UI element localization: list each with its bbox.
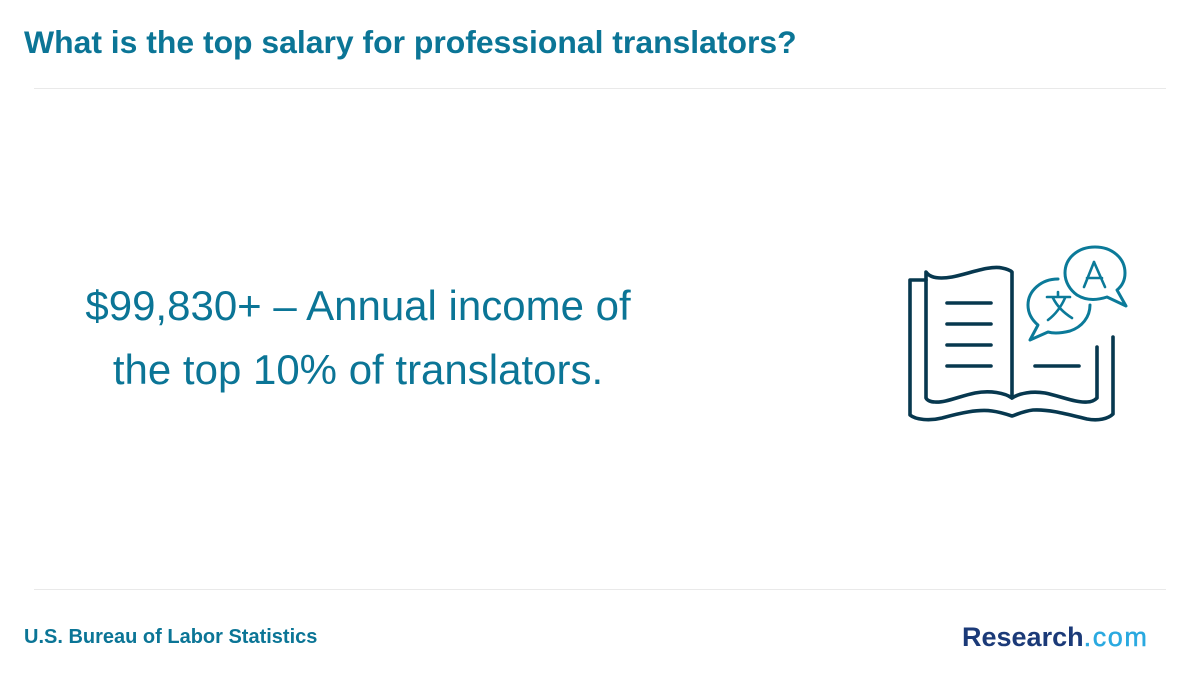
logo: Research.com: Research.com — [962, 622, 1149, 652]
source: U.S. Bureau of Labor Statistics — [24, 626, 317, 648]
main statistic text: the top 10% of translators. — [113, 346, 603, 392]
icon: open book with translation speech bubbles — [908, 246, 1128, 422]
title: What is the top salary for professional translators? — [24, 24, 797, 60]
main statistic text: $99,830+ – Annual income of — [85, 282, 631, 329]
icon: open book — [910, 267, 1113, 420]
icon: speech bubbles — [1028, 247, 1126, 340]
main statistic text — [85, 282, 631, 392]
